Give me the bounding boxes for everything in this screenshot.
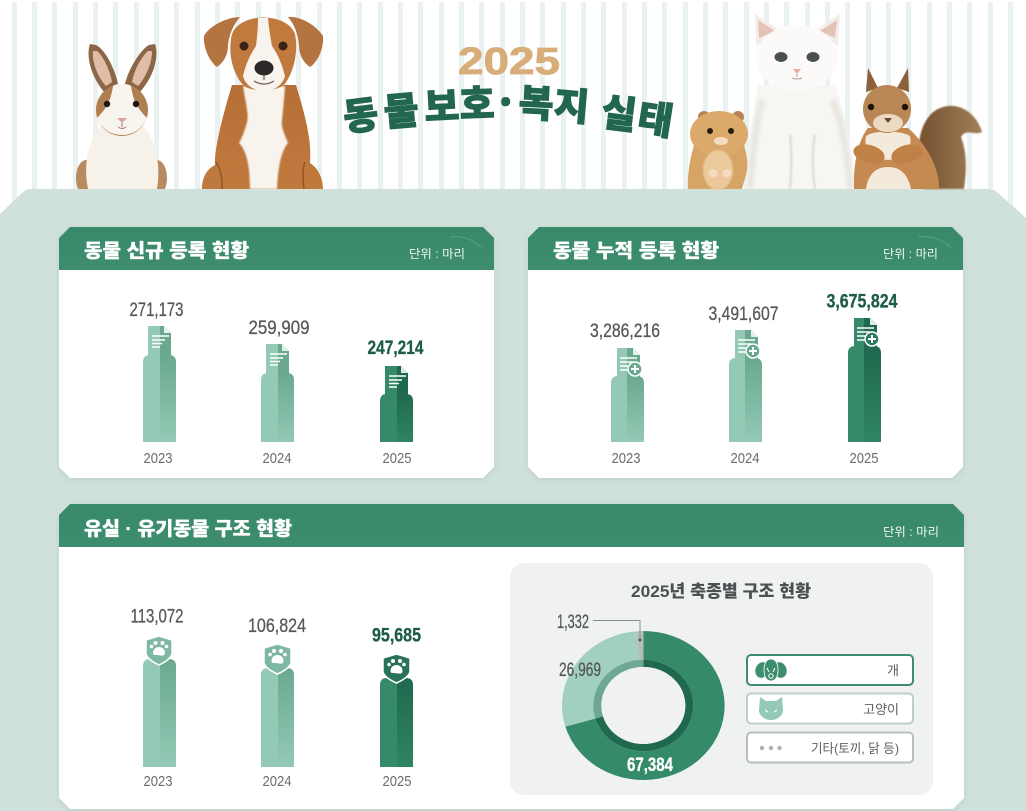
- value: 113,072: [130, 606, 184, 628]
- donut chart: [557, 612, 725, 780]
- unit label: 단위 : 마리: [409, 247, 465, 261]
- icon: dog: [753, 659, 789, 681]
- background stripes: [12, 2, 1013, 217]
- legend text: 개: [887, 663, 899, 678]
- panel header: [59, 227, 494, 270]
- unit label: 단위 : 마리: [883, 247, 938, 261]
- icon: cat: [759, 697, 783, 720]
- label: 1,332: [557, 612, 589, 633]
- year: 2024: [262, 450, 292, 467]
- heading: 동물 신규 등록 현황: [84, 240, 250, 262]
- value: 3,675,824: [826, 292, 898, 312]
- bar 2025: [380, 366, 413, 442]
- legend: dog: [747, 655, 913, 685]
- legend: cat: [747, 694, 913, 724]
- bar 2023: [611, 348, 644, 442]
- panel header: [59, 504, 964, 547]
- legend: other: [747, 732, 913, 762]
- year: 2024: [262, 773, 292, 790]
- bar 2024: [261, 644, 294, 767]
- legend text: 기타(토끼, 닭 등): [811, 741, 899, 756]
- label: 67,384: [627, 755, 673, 776]
- unit label: 단위 : 마리: [883, 525, 939, 539]
- bar 2025: [380, 654, 413, 767]
- illustration: squirrel: [851, 68, 982, 189]
- illustration: dog: [202, 17, 323, 189]
- illustration: cat: [745, 14, 855, 189]
- illustration: rabbit: [70, 44, 170, 201]
- year title: 2025: [458, 41, 560, 83]
- value: 95,685: [372, 626, 421, 646]
- value: 271,173: [130, 300, 184, 321]
- year: 2025: [382, 450, 412, 467]
- year: 2023: [144, 773, 172, 790]
- panel: rescue status: [59, 504, 964, 809]
- value: 247,214: [368, 338, 424, 359]
- bar 2023: [143, 326, 176, 442]
- heading: 유실 · 유기동물 구조 현황: [84, 518, 293, 540]
- panel: cumulative registrations: [528, 227, 963, 478]
- bar 2023: [143, 636, 176, 767]
- illustration: hamster: [688, 111, 748, 190]
- donut rings: [562, 631, 725, 780]
- panel: new registrations: [59, 227, 494, 478]
- segment: dog: [565, 631, 725, 780]
- value: 106,824: [248, 616, 306, 637]
- segment: other: [636, 631, 643, 660]
- mint background panel: [0, 189, 1026, 811]
- year: 2024: [730, 450, 760, 467]
- heading: 동물 누적 등록 현황: [553, 240, 720, 262]
- leader line: [593, 620, 640, 640]
- panel: species breakdown: [510, 563, 933, 795]
- legend text: 고양이: [863, 702, 899, 717]
- year: 2023: [144, 450, 172, 467]
- bar 2024: [261, 344, 294, 442]
- label: 26,969: [559, 660, 601, 681]
- value: 259,909: [248, 318, 310, 339]
- panel header: [528, 227, 963, 270]
- bar 2024: [729, 330, 762, 442]
- year: 2025: [382, 773, 412, 790]
- year: 2023: [612, 450, 640, 467]
- panel title: 2025년 축종별 구조 현황: [631, 582, 811, 601]
- main title: 동물보호·복지 실태: [340, 72, 677, 146]
- value: 3,491,607: [708, 304, 778, 325]
- icon: dots: [760, 746, 782, 750]
- segment: cat: [562, 631, 639, 727]
- bar 2025: [848, 318, 881, 442]
- year: 2025: [850, 450, 878, 467]
- value: 3,286,216: [590, 321, 660, 342]
